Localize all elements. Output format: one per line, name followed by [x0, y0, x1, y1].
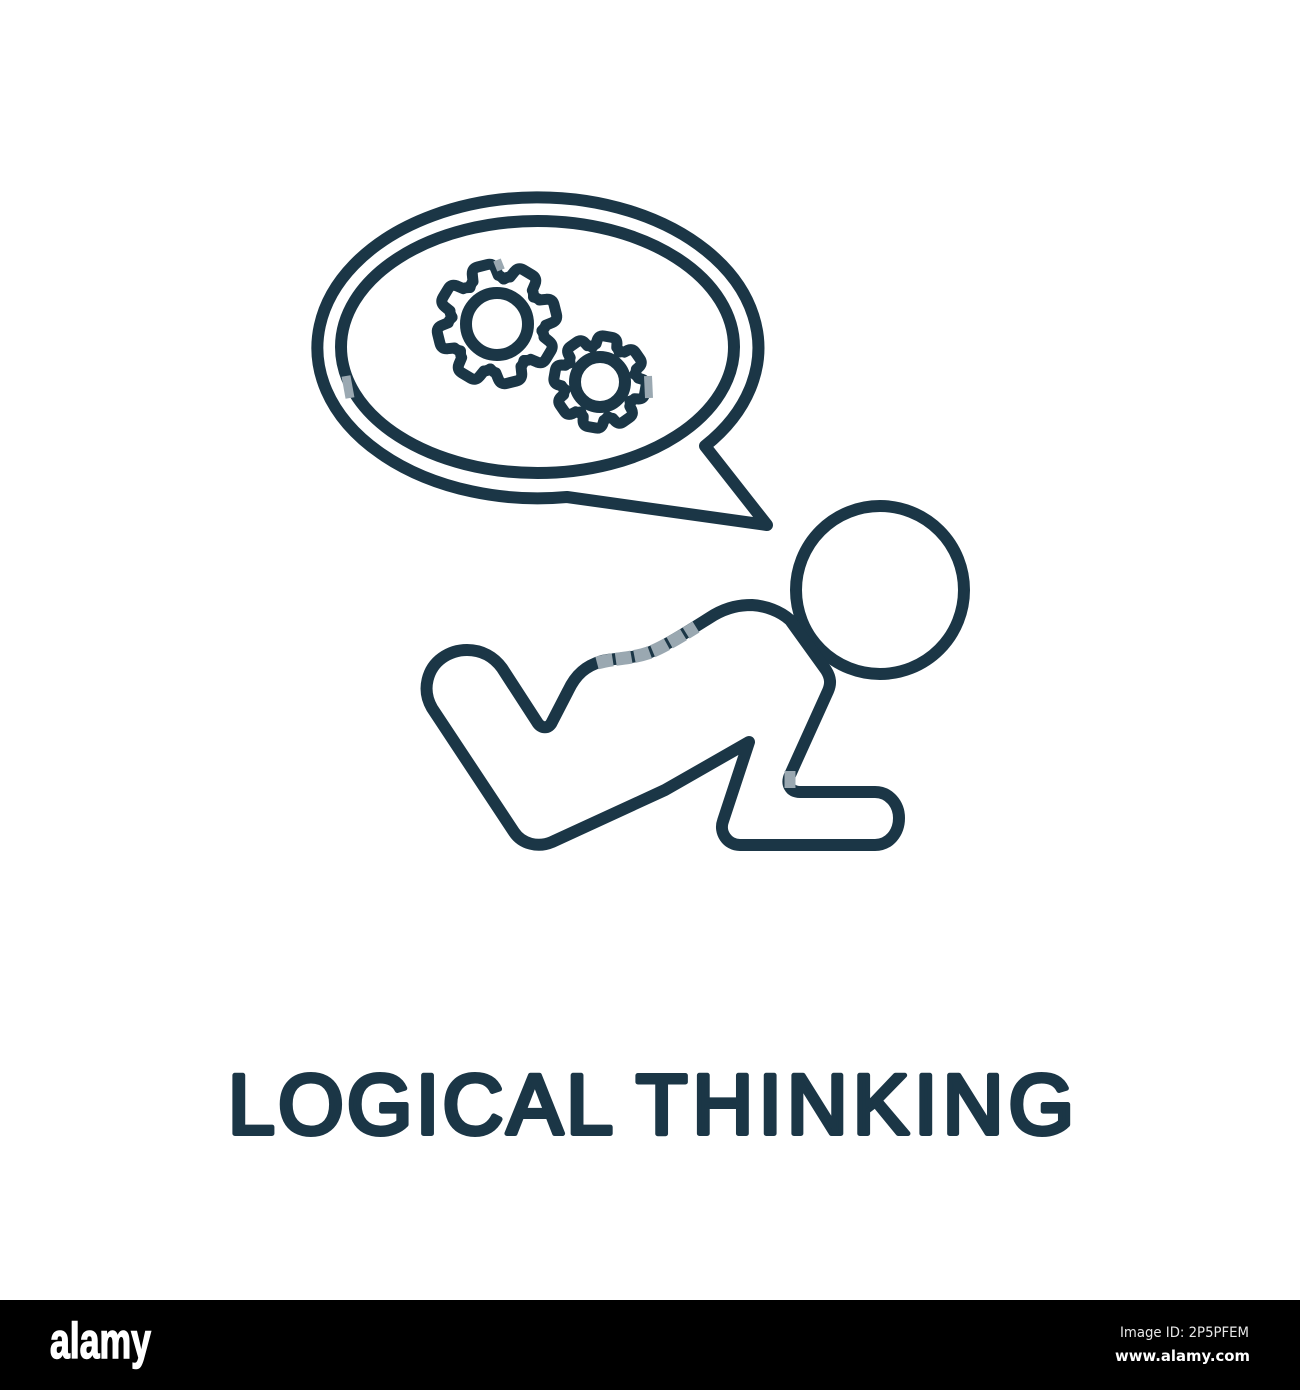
icon: speech bubble with gears — [317, 197, 767, 525]
icon: large gear — [435, 262, 559, 386]
speech bubble outer outline with tail — [317, 197, 767, 525]
title — [228, 1058, 1074, 1152]
watermark on person back — [597, 627, 696, 663]
alamy logo: alamy — [50, 1313, 151, 1369]
website url: www.alamy.com — [1115, 1347, 1250, 1365]
icon: small gear — [552, 334, 648, 430]
watermark on large gear — [497, 260, 501, 270]
title word: logical: LOGICAL — [228, 1058, 613, 1152]
watermark on bubble left — [346, 376, 350, 398]
image id: Image ID: 2P5PFEM — [1120, 1325, 1249, 1341]
person head — [796, 506, 964, 674]
watermark traces on the icon — [346, 260, 790, 788]
watermark on person knee — [784, 771, 796, 788]
person body outline — [427, 605, 899, 845]
icon: crawling person — [427, 506, 964, 845]
speech bubble inner ellipse — [341, 221, 734, 473]
watermark on small gear — [648, 376, 649, 398]
title word: thinking: THINKING — [636, 1058, 1074, 1152]
footer bar — [0, 1300, 1300, 1390]
